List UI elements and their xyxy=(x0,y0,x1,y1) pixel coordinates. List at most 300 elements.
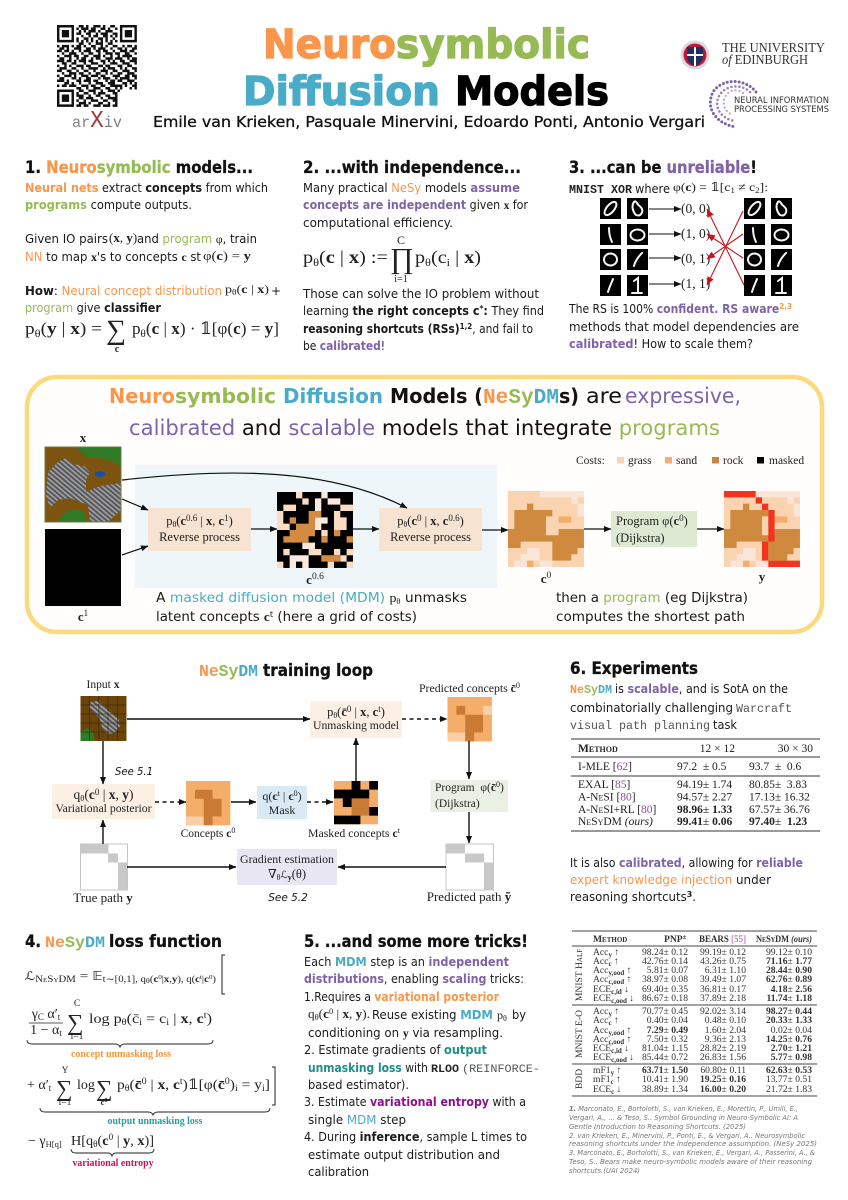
metric names: Acc xyxy=(593,1034,608,1045)
output unmasking term: i=1 xyxy=(59,1098,72,1108)
concepts label: Concepts c xyxy=(181,828,231,840)
BEARS column: 43.26± 0.75 xyxy=(700,956,746,967)
classifier formula: p xyxy=(132,319,140,338)
image x: warcraft map xyxy=(45,447,121,522)
table: scalability: A-NeSI [80] xyxy=(578,792,636,804)
loss first line: c xyxy=(204,974,209,984)
box: program: (Dijkstra) xyxy=(616,531,665,545)
references: 3. Marconato, E., Bortolotti, S., van Krieken, E., Vergari, A., Passerini, A., & xyxy=(569,1148,815,1157)
input image xyxy=(80,696,126,741)
output unmasking term: p xyxy=(117,1078,124,1093)
BEARS column: 16.00± 0.20 xyxy=(700,1084,746,1095)
table: calibration results xyxy=(572,931,817,1096)
label c0: c xyxy=(541,571,547,586)
panel: main NeSyDM overview xyxy=(27,377,822,632)
box: reverse process 2: θ xyxy=(403,520,407,529)
red arrows xyxy=(707,209,744,285)
XOR labels: (0, 0) xyxy=(681,201,710,216)
box: mask: Mask xyxy=(269,803,295,817)
box: reverse process 2: c xyxy=(411,514,417,528)
tricks text: q xyxy=(308,1007,314,1021)
NeSyDM column: 11.74± 1.18 xyxy=(766,993,812,1004)
banner heading: Models ( xyxy=(390,384,483,408)
flow arrows xyxy=(122,473,724,555)
PNP column: 85.44± 0.72 xyxy=(642,1052,688,1063)
output unmasking term: 0 xyxy=(225,1076,230,1086)
heading 4: loss function xyxy=(109,932,222,952)
concept unmasking term: θ xyxy=(122,1017,127,1027)
table: scalability: Method xyxy=(578,743,618,755)
independence formula: i=1 xyxy=(394,274,408,285)
label c0.6: c xyxy=(306,572,312,587)
labels under paths: True path y xyxy=(73,890,133,905)
concept unmasking term: ) xyxy=(207,1012,212,1027)
box: reverse process 1: c xyxy=(180,514,186,528)
entropy term: − γ xyxy=(28,1134,46,1149)
University of Edinburgh logo xyxy=(680,40,825,70)
PNP column: 86.67± 0.18 xyxy=(642,993,688,1004)
box: reverse process 1 xyxy=(148,508,251,551)
highlight: masked diffusion region xyxy=(135,465,497,588)
NeSyDM column: 20.33± 1.33 xyxy=(766,1015,812,1026)
grid y with path xyxy=(724,491,800,567)
metric names: ↑ xyxy=(612,956,619,967)
XOR labels: (1, 1) xyxy=(681,276,710,291)
table header: ± xyxy=(683,933,687,941)
concept unmasking term: (c̄ xyxy=(127,1012,140,1027)
box: program: Program φ(c̄ xyxy=(435,782,496,794)
label x: x xyxy=(80,430,87,445)
box: gradient estimation: Gradient estimation xyxy=(240,852,334,866)
legend: costs: grass xyxy=(628,455,652,467)
QR code xyxy=(57,26,137,106)
output unmasking term: c̄ xyxy=(135,1078,142,1093)
box: program: ) xyxy=(500,782,504,794)
tricks text: RLOO xyxy=(431,1064,459,1076)
heading 5: 5. ...and some more tricks! xyxy=(304,932,528,952)
BEARS column: 39.49± 1.07 xyxy=(700,974,746,985)
shortcuts text: reasoning shortcuts (RSs) xyxy=(303,322,472,336)
box: unmasking model: Unmasking model xyxy=(313,718,400,732)
experiments text: NeSyDM xyxy=(570,683,612,697)
experiments text: Warcraft xyxy=(736,702,792,716)
classifier formula: θ xyxy=(35,328,41,340)
BEARS column: 9.36± 2.13 xyxy=(705,1034,746,1045)
box: unmasking model xyxy=(310,701,402,738)
caption: program: computes the shortest path xyxy=(556,610,745,625)
metric names xyxy=(593,947,634,1096)
MNIST digits right xyxy=(744,198,792,296)
independence text: concepts are independent given x for xyxy=(303,198,528,212)
table: scalability: I-MLE [62] xyxy=(578,761,632,773)
concept unmasking term: i=1 xyxy=(71,1032,84,1042)
box: mask: ) xyxy=(298,789,302,803)
tricks text: 4. During inference, sample L times to xyxy=(304,1130,527,1144)
box: gradient estimation: ℒ xyxy=(281,870,288,881)
metric names: ↓ xyxy=(622,984,629,995)
references: shortcuts.(UAI 2024) xyxy=(569,1166,640,1175)
metric names: ↑ xyxy=(624,974,631,985)
banner heading: Diffusion xyxy=(283,384,383,408)
metric names: c,ood xyxy=(608,978,624,986)
how text: program give classifier xyxy=(25,301,161,315)
independence formula: i xyxy=(447,257,450,269)
entropy term xyxy=(28,1132,154,1169)
labels under paths: See 5.2 xyxy=(268,892,308,904)
metric names: ↑ xyxy=(612,947,619,958)
heading 4: 4. xyxy=(25,932,41,952)
classifier formula: ∑ xyxy=(106,315,126,346)
metric names: ↓ xyxy=(627,1052,634,1063)
independence formula: | xyxy=(450,247,464,267)
independence text: computational efficiency. xyxy=(303,216,453,230)
box: reverse process 1: 0.6 xyxy=(186,513,198,523)
heading 4: NeSyDM xyxy=(45,934,105,952)
entropy term: ( xyxy=(98,1134,103,1149)
metric names: mF1 xyxy=(593,1065,611,1076)
metric names: ↓ xyxy=(622,1043,629,1054)
tricks text: p xyxy=(497,1008,503,1022)
metric names: ↑ xyxy=(624,1025,631,1036)
metric names: ECE xyxy=(593,1043,611,1054)
tricks text: by xyxy=(512,1008,526,1022)
heading 4 xyxy=(25,932,222,952)
loss first line: t∼[0,1], q xyxy=(103,974,146,984)
box: reverse process 1: ( xyxy=(176,514,180,528)
shortcuts text: be calibrated! xyxy=(303,339,385,353)
output unmasking term: x, c xyxy=(157,1078,179,1093)
XOR labels xyxy=(681,201,710,291)
box: program: 0 xyxy=(679,513,684,523)
PNP column xyxy=(642,947,688,1095)
arXiv logo: arXiv xyxy=(72,108,122,135)
table header xyxy=(593,933,812,945)
how text xyxy=(25,282,281,315)
entropy term: 0 xyxy=(109,1132,114,1142)
BEARS column: 28.82± 2.19 xyxy=(700,1043,746,1054)
concept unmasking term: i xyxy=(166,1017,170,1027)
concept unmasking term: t xyxy=(58,1012,61,1022)
box: program: 0 xyxy=(496,780,500,789)
output unmasking term: 0 xyxy=(142,1076,147,1086)
how text: p xyxy=(225,282,231,296)
panel: 5. more tricks xyxy=(304,932,540,1179)
loss first line: ) xyxy=(212,974,216,984)
concept unmasking term: γ xyxy=(32,1007,38,1022)
table: scalability: 80.85± 3.83 xyxy=(749,779,807,791)
PNP column: 7.50± 0.32 xyxy=(647,1034,688,1045)
IO pairs text: φ(c) = y xyxy=(203,248,252,263)
metric names: ↑ xyxy=(612,1015,619,1026)
entropy term: variational entropy xyxy=(72,1158,154,1169)
independence formula: x) xyxy=(464,247,480,267)
box: reverse process 1: Reverse process xyxy=(159,530,240,544)
box: unmasking model: ) xyxy=(381,705,385,719)
box: reverse process 1: θ xyxy=(172,520,176,529)
IO pairs text: (x, y) xyxy=(109,230,137,245)
references: 1. Marconato, E., Bortolotti, S., van Krieken, E., Morettin, P., Umili, E., xyxy=(569,1104,798,1113)
concept unmasking term: = c xyxy=(142,1012,166,1027)
references xyxy=(569,1104,817,1175)
group labels: MNIST E-O xyxy=(574,1010,585,1058)
tricks text: conditioning on y via resampling. xyxy=(308,1026,503,1040)
box: program: ) xyxy=(684,514,688,528)
heading 2: 2. ...with independence... xyxy=(303,158,521,178)
heading 1: 1. Neurosymbolic models... xyxy=(25,158,253,178)
NeSyDM column: 99.12± 0.10 xyxy=(766,947,812,958)
predicted concepts label: Predicted concepts c̄ xyxy=(419,683,516,695)
tricks text: Reuse existing MDM xyxy=(372,1008,493,1022)
banner heading: are xyxy=(586,384,622,408)
experiments text: is scalable, and is SotA on the xyxy=(615,682,788,696)
PNP column: 42.76± 0.14 xyxy=(642,956,688,967)
box: variational posterior: c xyxy=(89,787,95,802)
box: reverse process 2: | xyxy=(422,514,430,528)
PNP column: 38.89± 1.34 xyxy=(642,1084,688,1095)
box: mask: q(c xyxy=(262,789,278,803)
labels under paths: Predicted path ỹ xyxy=(427,889,512,904)
intro text: programs compute outputs. xyxy=(25,198,192,212)
concept unmasking term: 1 − α xyxy=(30,1023,59,1038)
label c0.6: 0.6 xyxy=(312,572,324,582)
box: unmasking model: 0 xyxy=(347,704,352,714)
metric names: ↓ xyxy=(627,993,634,1004)
independence formula: ∏ xyxy=(390,243,414,275)
metric names: c xyxy=(611,1088,614,1096)
BEARS column: 60.80± 0.11 xyxy=(700,1065,746,1076)
independence text: Many practical NeSy models assume xyxy=(303,181,520,195)
BEARS column: 6.31± 1.10 xyxy=(705,965,746,976)
authors: Emile van Krieken, Pasquale Minervini, Edoardo Ponti, Antonio Vergari xyxy=(153,113,705,131)
box: gradient estimation: ∇ xyxy=(268,867,277,881)
output unmasking term: output unmasking loss xyxy=(108,1116,202,1127)
metric names: ↑ xyxy=(614,1065,621,1076)
XOR labels: (0, 1) xyxy=(681,251,710,266)
output unmasking term: c̄ xyxy=(218,1078,225,1093)
concept unmasking term: x, c xyxy=(180,1012,203,1027)
banner heading: symbolic xyxy=(175,384,276,408)
tricks text: 3. Estimate variational entropy with a xyxy=(304,1095,526,1109)
references: 2. van Krieken, E., Minervini, P., Ponti, E., & Vergari, A.. Neurosymbolic xyxy=(569,1131,805,1140)
PNP column: 98.24± 0.12 xyxy=(642,947,688,958)
concept unmasking term: ∑ xyxy=(67,1010,83,1035)
metric names: c xyxy=(608,960,612,968)
calibration text: 3 xyxy=(687,890,692,899)
heading 3: 3. ...can be unreliable! xyxy=(569,158,757,178)
table header: PNP xyxy=(664,934,683,945)
box: mask: t xyxy=(278,789,281,798)
confidence text: The RS is 100% confident. RS aware xyxy=(569,302,793,316)
concept unmasking term: t xyxy=(59,1028,62,1038)
box: reverse process 1: 1 xyxy=(224,513,229,523)
box: program xyxy=(430,780,508,812)
metric names: Acc xyxy=(593,1006,608,1017)
concept unmasking term: log p xyxy=(89,1012,117,1027)
how text: θ xyxy=(232,288,237,297)
box: variational posterior: Variational posterior xyxy=(56,803,152,815)
experiments text xyxy=(570,682,792,733)
output unmasking term: i xyxy=(262,1083,265,1093)
loss first line: | xyxy=(162,974,164,984)
metric names: ECE xyxy=(593,984,611,995)
caption: MDM xyxy=(156,590,467,625)
shortcuts text: , and fail to xyxy=(472,322,533,336)
BEARS column xyxy=(700,947,746,1095)
confidence text: calibrated! How to scale them? xyxy=(569,337,753,351)
output unmasking term: ] xyxy=(265,1078,270,1093)
table: scalability: 97.40± 1.23 xyxy=(749,816,807,828)
box: variational posterior: ( xyxy=(84,787,89,802)
training loop title: training loop xyxy=(263,661,373,681)
BEARS column: 0.48± 0.10 xyxy=(705,1015,746,1026)
output unmasking term: i xyxy=(235,1083,238,1093)
NeSyDM column: 28.44± 0.90 xyxy=(766,965,812,976)
box: gradient estimation: y xyxy=(288,873,292,882)
PNP column: 10.41± 1.90 xyxy=(642,1074,688,1085)
metric names: c,ood xyxy=(608,1038,624,1046)
shortcuts text: They find xyxy=(492,304,548,318)
shortcuts text: * xyxy=(479,304,484,313)
caption: MDM: unmasks xyxy=(401,591,467,606)
box: gradient estimation xyxy=(237,849,337,885)
independence formula: p xyxy=(303,247,312,267)
loss first line: c xyxy=(153,974,158,984)
label c1: 1 xyxy=(84,608,88,618)
tricks text: unmasking loss with xyxy=(308,1061,428,1075)
table: scalability: 97.2 ± 0.5 xyxy=(677,761,727,773)
heading 6: 6. Experiments xyxy=(570,659,698,679)
box: reverse process 2: ( xyxy=(407,514,411,528)
box: reverse process 1: | xyxy=(197,514,206,528)
box: mask xyxy=(257,786,307,819)
concept unmasking term: C xyxy=(74,999,80,1009)
banner heading: expressive, xyxy=(625,384,741,408)
table: scalability: 17.13± 16.32 xyxy=(749,792,810,804)
labels under paths xyxy=(73,889,512,905)
entropy term: H[q xyxy=(71,1134,93,1149)
metric names: Acc xyxy=(593,1025,608,1036)
independence text xyxy=(303,181,528,230)
caption: MDM: latent concepts c xyxy=(156,609,270,625)
metric names: y,ood xyxy=(608,1029,624,1037)
NeSyDM column: 5.77± 0.98 xyxy=(771,1052,812,1063)
MNIST XOR definition: where xyxy=(635,182,670,196)
panel: 1. Neurosymbolic models xyxy=(25,158,281,355)
University of Edinburgh logo: THE UNIVERSITY xyxy=(722,41,825,56)
legend: costs xyxy=(576,455,804,467)
metric names: ↑ xyxy=(614,1074,621,1085)
IO pairs text xyxy=(25,230,257,264)
how text: How: Neural concept distribution xyxy=(25,284,222,298)
classifier formula: ( xyxy=(146,319,152,338)
PNP column: 7.29± 0.49 xyxy=(647,1025,688,1036)
table: scalability: 30 × 30 xyxy=(778,743,813,755)
BEARS column: 36.81± 0.17 xyxy=(700,984,746,995)
confidence text: 2,3 xyxy=(779,302,792,311)
concepts grid xyxy=(186,781,230,825)
grid c0.6 xyxy=(277,492,353,568)
box: program xyxy=(611,511,697,547)
MNIST XOR definition: MNIST XOR xyxy=(569,183,633,197)
label c1: c xyxy=(78,609,84,624)
independence formula xyxy=(303,233,481,285)
box: reverse process 2: 0 xyxy=(417,513,422,523)
training loop title: NeSyDM xyxy=(199,663,258,682)
MNIST XOR definition: ≠ c xyxy=(735,180,755,194)
box: reverse process 2: 0.6 xyxy=(448,513,460,523)
caption: MDM: θ xyxy=(396,597,401,606)
NeSyDM column: 14.25± 0.76 xyxy=(766,1034,812,1045)
classifier formula: c xyxy=(115,344,120,355)
metric names: ↑ xyxy=(624,1034,631,1045)
masked concepts label: t xyxy=(398,826,401,835)
group labels: BDD xyxy=(574,1069,585,1089)
PNP column: 81.04± 1.15 xyxy=(642,1043,688,1054)
output unmasking term: log xyxy=(77,1078,95,1093)
classifier formula xyxy=(25,315,279,355)
loss first line: 𝔼 xyxy=(92,969,103,983)
loss first line: θ xyxy=(146,977,151,985)
NeSyDM column: 62.76± 0.89 xyxy=(766,974,812,985)
title: Models xyxy=(455,69,609,115)
panel: 3. can be unreliable xyxy=(568,158,799,351)
NeSyDM column: 13.77± 0.51 xyxy=(766,1074,812,1085)
panel: training loop diagram xyxy=(52,661,520,905)
PNP column: 70.77± 0.45 xyxy=(642,1006,688,1017)
metric names: c,ood xyxy=(611,1056,627,1064)
output unmasking term: | xyxy=(147,1078,157,1093)
metric names: Acc xyxy=(593,947,608,958)
table: scalability: 98.96± 1.33 xyxy=(677,804,732,816)
metric names: y xyxy=(608,1010,612,1018)
concept unmasking term: concept unmasking loss xyxy=(71,1049,171,1060)
box: reverse process 1: x, c xyxy=(206,514,224,528)
classifier formula: y | x) = xyxy=(47,319,99,338)
MNIST XOR definition: ]: xyxy=(760,180,768,194)
box: gradient estimation: θ xyxy=(277,873,281,882)
banner heading: NeSyDM xyxy=(483,387,559,410)
entropy term: θ xyxy=(93,1139,98,1149)
PNP column: 0.40± 0.04 xyxy=(647,1015,688,1026)
BEARS column: 37.89± 2.18 xyxy=(700,993,746,1004)
concepts label: 0 xyxy=(231,826,235,835)
confidence text: methods that model dependencies are xyxy=(569,320,799,334)
NeSyDM column: 98.27± 0.44 xyxy=(766,1006,812,1017)
metric names: Acc xyxy=(593,1015,608,1026)
title xyxy=(243,22,609,115)
box: mask: 0 xyxy=(294,789,298,798)
table: scalability: 94.19± 1.74 xyxy=(677,779,732,791)
box: reverse process 2: x, c xyxy=(430,514,448,528)
true path grid xyxy=(80,844,128,890)
group labels xyxy=(574,949,585,1089)
loss first line: 0 xyxy=(209,975,212,981)
metric names: ↓ xyxy=(614,1084,621,1095)
tricks text: (REINFORCE- xyxy=(462,1064,540,1076)
calibration text: reasoning shortcuts xyxy=(570,890,689,904)
training arrows xyxy=(103,719,469,867)
metric names: Acc xyxy=(593,956,608,967)
metric names: c,id xyxy=(611,1047,622,1055)
box: unmasking model: p xyxy=(327,705,333,719)
entropy term: c xyxy=(102,1134,109,1149)
box: reverse process 2: Reverse process xyxy=(390,530,471,544)
metric names: y,ood xyxy=(608,969,624,977)
independence formula: ( xyxy=(431,247,438,268)
panel: 4. loss function xyxy=(25,932,275,1169)
entropy term: | xyxy=(113,1134,123,1149)
predicted concepts label: 0 xyxy=(516,681,520,690)
